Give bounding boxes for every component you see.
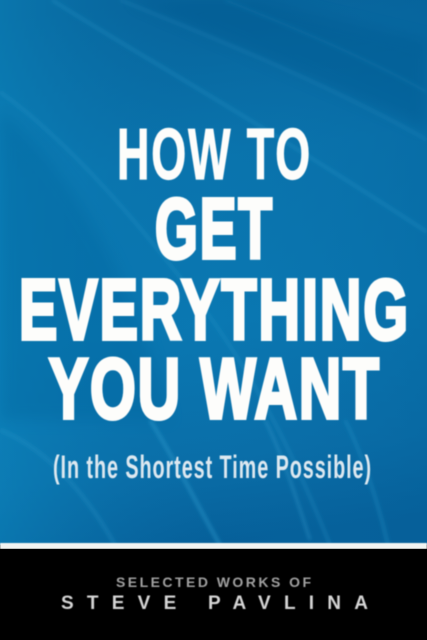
title	[19, 115, 410, 437]
author name: STEVE PAVLINA	[61, 593, 368, 614]
series line: SELECTED WORKS OF	[116, 574, 311, 590]
title line: how to: HOW TO	[117, 115, 312, 195]
white rule	[0, 543, 427, 549]
black footer panel	[0, 549, 427, 640]
title line: get: GET	[155, 182, 274, 277]
